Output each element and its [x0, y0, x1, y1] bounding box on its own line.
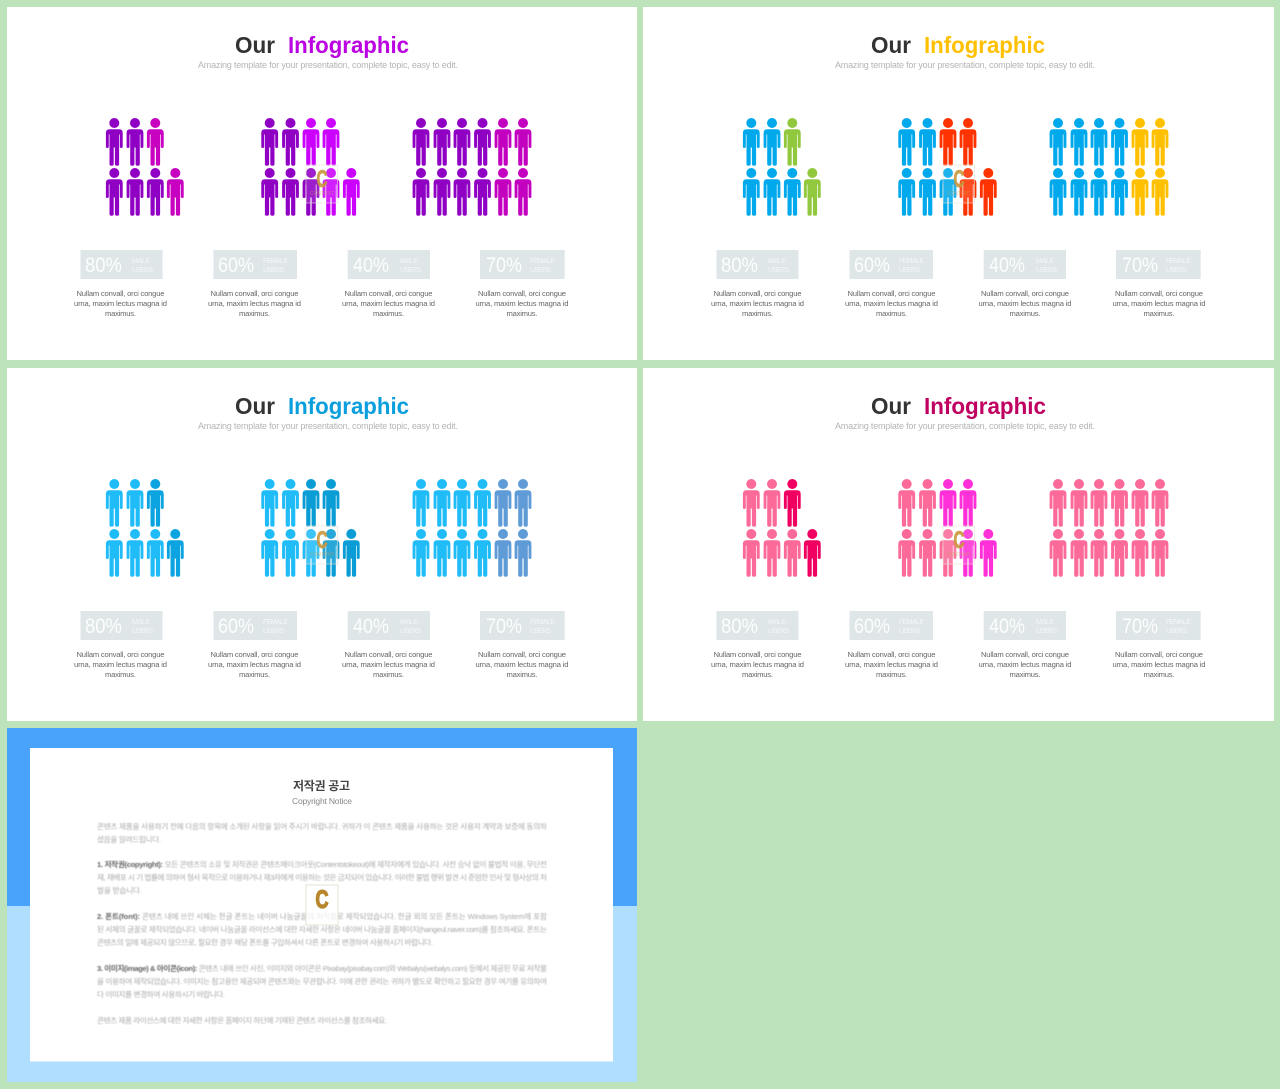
text block: descriptions: Nullam convall, orci congue — [1115, 289, 1203, 298]
stat: 40% male users: 40% — [989, 615, 1025, 638]
stat: 70% female users: FEMALE — [1166, 258, 1191, 265]
text block: descriptions: urna, maxim lectus magna id — [711, 660, 804, 669]
text block: descriptions: urna, maxim lectus magna id — [208, 299, 301, 308]
watermark — [306, 526, 338, 564]
text block: descriptions: maximus. — [373, 309, 404, 318]
watermark: C — [316, 886, 328, 914]
text block: descriptions: maximus. — [105, 670, 136, 679]
pictogram chart: 40% / 70% group — [1050, 118, 1168, 216]
stat: 40% male users — [984, 611, 1066, 640]
text block: descriptions: Nullam convall, orci congue — [981, 289, 1069, 298]
stat: 60% female users: FEMALE — [263, 619, 288, 626]
stat: 40% male users: USERS — [400, 628, 421, 635]
stat: 70% female users — [480, 250, 565, 279]
stat: 40% male users — [984, 250, 1066, 279]
text block: descriptions: Nullam convall, orci congue — [1115, 650, 1203, 659]
stat: 40% male users: MALE — [1036, 619, 1054, 626]
stat: 40% male users: USERS — [1036, 267, 1057, 274]
title: Our — [871, 32, 911, 58]
title — [871, 393, 1046, 419]
stat: 80% male users: USERS — [768, 267, 789, 274]
watermark: CONTENT — [947, 552, 971, 558]
text block: copyright clause — [97, 859, 547, 895]
text block: descriptions: urna, maxim lectus magna id — [1112, 660, 1206, 669]
heading: copyright notice — [292, 778, 352, 806]
text block: descriptions: maximus. — [506, 670, 538, 679]
stat: 40% male users — [348, 611, 430, 640]
watermark: C — [954, 527, 964, 554]
pictogram chart: 40% / 70% group — [413, 118, 531, 216]
text block: image and icon clause: 다 이미지를 변경하여 사용하시기 바랍니다. — [97, 989, 225, 999]
text block: descriptions: maximus. — [876, 309, 907, 318]
text block: descriptions: Nullam convall, orci congue — [210, 650, 298, 659]
text block: descriptions: maximus. — [1010, 670, 1040, 679]
text block: descriptions: Nullam convall, orci congue — [714, 650, 802, 659]
title: Infographic — [288, 32, 409, 58]
pictogram chart: 80% group — [743, 479, 821, 577]
text block: font clause: 된 서체의 글꼴로 제작되었습니다. 네이버 나눔글꼴 라이선스에 대한 자세한 사항은 네이버 나눔글꼴 홈페이지(hangeul.naver.com)를 참조하세요. 폰트는 — [97, 924, 547, 934]
stat: 70% female users: FEMALE — [1166, 619, 1191, 626]
stat: 80% male users: 80% — [721, 615, 758, 638]
stat: 60% female users — [214, 250, 297, 279]
title — [871, 32, 1045, 58]
title: Infographic — [288, 393, 409, 419]
stat: 40% male users: 40% — [353, 615, 389, 638]
stat: 80% male users — [80, 250, 162, 279]
title: Our — [235, 32, 275, 58]
text block: descriptions: Nullam convall, orci congue — [981, 650, 1069, 659]
text block: copyright clause: 재, 재배포 시 기 법률에 의하여 형사 목적으로 이용하거나 제3자에게 이용하는 것은 금지되어 있습니다. 이러한 불법 행위 발견 시 준엄한 민사 및 형사상의 처 — [97, 872, 547, 882]
subtitle: Amazing template for your presentation, complete topic, easy to edit. — [198, 60, 458, 70]
watermark: CONTENT — [947, 191, 971, 197]
panel: purple slide — [7, 7, 637, 360]
watermark — [943, 165, 974, 203]
text block: descriptions: Nullam convall, orci congue — [848, 650, 936, 659]
stat: 70% female users: USERS — [1166, 267, 1187, 274]
panel: pink slide — [643, 368, 1274, 721]
heading: copyright notice: Copyright Notice — [292, 796, 352, 806]
stat: 80% male users — [716, 250, 798, 279]
text block: descriptions — [74, 650, 568, 679]
stat: 80% male users: USERS — [768, 628, 789, 635]
text block: introduction: 셨음을 알려드립니다. — [97, 834, 161, 844]
stat: 80% male users — [80, 611, 162, 640]
stat: 60% female users: USERS — [263, 267, 284, 274]
watermark: C — [316, 527, 328, 554]
stat: 70% female users: FEMALE — [530, 258, 555, 265]
stat: 70% female users: USERS — [530, 267, 551, 274]
text block: descriptions: urna, maxim lectus magna id — [978, 660, 1072, 669]
stat: 40% male users: MALE — [1036, 258, 1054, 265]
title: Infographic — [924, 393, 1046, 419]
text block: introduction: 콘텐츠 제품을 사용하기 전에 다음의 항목에 소개된 사항을 읽어 주시기 바랍니다. 귀하가 이 콘텐츠 제품을 사용하는 것은 사용자 계약과 보증에 동의하 — [97, 821, 547, 831]
stat: 80% male users: 80% — [721, 254, 758, 277]
text block: descriptions: Nullam convall, orci congue — [210, 289, 298, 298]
text block: descriptions: maximus. — [239, 670, 270, 679]
text block: copyright clause: 1. 저작권(copyright): 모든 콘텐츠의 소유 및 저작권은 콘텐츠메이크아웃(Contentstokeout)에 제작자에게 있습니다. 사전 승낙 없이 불법적 이용, 무단전 — [97, 859, 547, 869]
subtitle: Amazing template for your presentation, complete topic, easy to edit. — [835, 60, 1095, 70]
stat: 60% female users: FEMALE — [899, 258, 924, 265]
title: Our — [871, 393, 911, 419]
text block: font clause — [97, 911, 547, 947]
stat: 40% male users: USERS — [400, 267, 421, 274]
stat: 60% female users: 60% — [854, 254, 890, 277]
stat: 60% female users: USERS — [899, 628, 920, 635]
stat: 70% female users: 70% — [1122, 615, 1158, 638]
pictogram chart: 60% group — [261, 479, 360, 577]
text block: descriptions: maximus. — [506, 309, 538, 318]
stat: 80% male users: USERS — [132, 628, 153, 635]
text block: descriptions: urna, maxim lectus magna id — [978, 299, 1072, 308]
subtitle: Amazing template for your presentation, complete topic, easy to edit. — [198, 421, 458, 431]
subtitle: Amazing template for your presentation, complete topic, easy to edit. — [835, 421, 1095, 431]
stat: 70% female users — [1116, 611, 1201, 640]
text block: copyright clause: 벌을 받습니다. — [97, 885, 142, 895]
stat: 40% male users: 40% — [353, 254, 389, 277]
text block: descriptions: urna, maxim lectus magna id — [476, 660, 568, 669]
stat: 60% female users: USERS — [899, 267, 920, 274]
stat: 70% female users — [1116, 250, 1201, 279]
text block: descriptions: maximus. — [1010, 309, 1040, 318]
stat: 80% male users: MALE — [768, 619, 786, 626]
stat: 60% female users: 60% — [854, 615, 890, 638]
pictogram chart: 80% group — [743, 118, 821, 216]
text block: descriptions: urna, maxim lectus magna id — [74, 660, 167, 669]
text block: descriptions — [711, 650, 1206, 679]
stat: 80% male users: 80% — [85, 615, 122, 638]
watermark: CONTENT — [310, 552, 334, 558]
watermark — [943, 526, 974, 564]
pictogram chart: 80% group — [106, 118, 184, 216]
panel: blue slide — [7, 368, 637, 721]
stat: 60% female users: FEMALE — [263, 258, 288, 265]
text block: descriptions: Nullam convall, orci congue — [478, 289, 566, 298]
panel: copyright notice slide — [7, 728, 637, 1082]
title — [235, 393, 409, 419]
text block: descriptions: Nullam convall, orci congue — [848, 289, 936, 298]
text block: descriptions: urna, maxim lectus magna id — [476, 299, 568, 308]
stat: 40% male users: MALE — [400, 258, 418, 265]
stat: 80% male users: MALE — [132, 258, 150, 265]
title: Our — [235, 393, 275, 419]
text block: descriptions: urna, maxim lectus magna id — [1112, 299, 1206, 308]
text block: descriptions: maximus. — [742, 670, 773, 679]
pictogram chart: 60% group — [898, 479, 997, 577]
stat: 40% male users: USERS — [1036, 628, 1057, 635]
text block: descriptions: urna, maxim lectus magna id — [342, 299, 435, 308]
stat: 60% female users — [850, 250, 933, 279]
text block: image and icon clause — [97, 963, 547, 999]
heading: copyright notice: 저작권 공고 — [293, 778, 350, 793]
stat: 80% male users: MALE — [768, 258, 786, 265]
stat: 70% female users — [480, 611, 565, 640]
pictogram chart: 80% group — [106, 479, 184, 577]
text block: descriptions: Nullam convall, orci congue — [344, 289, 432, 298]
stat: 60% female users: 60% — [218, 615, 254, 638]
stat: 70% female users: USERS — [1166, 628, 1187, 635]
text block: descriptions: Nullam convall, orci congue — [478, 650, 566, 659]
title — [235, 32, 409, 58]
pictogram chart: 40% / 70% group — [1050, 479, 1168, 577]
text block: descriptions: maximus. — [373, 670, 404, 679]
stat: 60% female users — [214, 611, 297, 640]
stat: 40% male users: MALE — [400, 619, 418, 626]
watermark: C — [316, 166, 328, 193]
text block: descriptions: maximus. — [1144, 670, 1174, 679]
stat: 70% female users: 70% — [486, 615, 522, 638]
text block: descriptions: maximus. — [1144, 309, 1174, 318]
text block: descriptions — [74, 289, 568, 318]
stat: 70% female users: FEMALE — [530, 619, 555, 626]
watermark — [306, 885, 338, 925]
stat: 80% male users: 80% — [85, 254, 122, 277]
text block: descriptions: urna, maxim lectus magna id — [342, 660, 435, 669]
text block: descriptions: urna, maxim lectus magna id — [74, 299, 167, 308]
stat: 60% female users — [850, 611, 933, 640]
text block: descriptions: urna, maxim lectus magna id — [845, 299, 938, 308]
text block: descriptions: urna, maxim lectus magna id — [845, 660, 938, 669]
panel: multicolor slide — [643, 7, 1274, 360]
pictogram chart: 60% group — [261, 118, 360, 216]
stat: 70% female users: USERS — [530, 628, 551, 635]
text block: descriptions: maximus. — [239, 309, 270, 318]
text block: descriptions: maximus. — [105, 309, 136, 318]
text block: image and icon clause: 3. 이미지(image) & 아이콘(icon): 콘텐츠 내에 쓰인 사진, 이미지와 아이콘은 Pixabay(pixabay.com)와 Webalys(webalys.com) 등에서 제공된 무료 저작물 — [97, 963, 547, 973]
stat: 60% female users: FEMALE — [899, 619, 924, 626]
text block: descriptions: urna, maxim lectus magna id — [711, 299, 804, 308]
text block: introduction — [97, 821, 547, 844]
stat: 80% male users: USERS — [132, 267, 153, 274]
stat: 40% male users — [348, 250, 430, 279]
text block: descriptions: Nullam convall, orci congue — [714, 289, 802, 298]
stat: 70% female users: 70% — [1122, 254, 1158, 277]
text block: descriptions: Nullam convall, orci congue — [76, 289, 164, 298]
text block: font clause: 2. 폰트(font): 콘텐츠 내에 쓰인 서체는 한글 폰트는 네이버 나눔글꼴의 저작물로 제작되었습니다. 한글 외의 모든 폰트는 Windows System에 포함 — [97, 911, 547, 921]
stat: 80% male users: MALE — [132, 619, 150, 626]
text block: descriptions: maximus. — [876, 670, 907, 679]
pictogram chart: 40% / 70% group — [413, 479, 531, 577]
watermark — [306, 165, 338, 203]
stat: 80% male users — [716, 611, 798, 640]
text block: descriptions: Nullam convall, orci congue — [344, 650, 432, 659]
stat: 60% female users: 60% — [218, 254, 254, 277]
stat: 40% male users: 40% — [989, 254, 1025, 277]
stat: 70% female users: 70% — [486, 254, 522, 277]
text block: license note: 콘텐츠 제품 라이선스에 대한 자세한 사항은 홈페이지 하단에 기재된 콘텐츠 라이선스를 참조하세요. — [97, 1015, 387, 1025]
watermark: CONTENT — [310, 191, 334, 197]
text block: descriptions: urna, maxim lectus magna id — [208, 660, 301, 669]
title: Infographic — [924, 32, 1045, 58]
stat: 60% female users: USERS — [263, 628, 284, 635]
text block: image and icon clause: 을 이용하여 제작되었습니다. 이미지는 참고용만 제공되며 콘텐츠와는 무관합니다. 이에 관한 권리는 귀하가 별도로 확인하고 필요한 경우 여기를 유의하여 — [97, 976, 547, 986]
text block: font clause: 콘텐츠의 일에 제공되지 않으므로, 필요한 경우 해당 폰트를 구입하셔서 다른 폰트로 변경하여 사용하시기 바랍니다. — [97, 937, 433, 947]
watermark: C — [954, 166, 964, 193]
text block: descriptions: Nullam convall, orci congue — [76, 650, 164, 659]
text block: descriptions — [711, 289, 1206, 318]
text block: descriptions: maximus. — [742, 309, 773, 318]
pictogram chart: 60% group — [898, 118, 997, 216]
